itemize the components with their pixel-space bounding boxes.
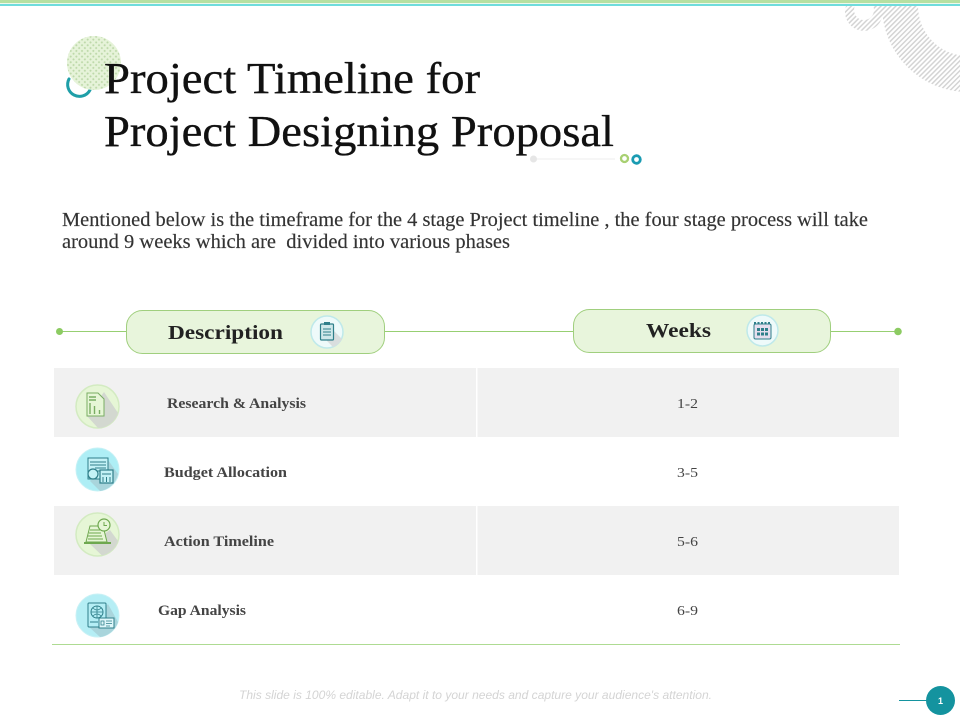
table row: Action Timeline: Action Timeline bbox=[164, 534, 274, 550]
table row: Research & Analysis bbox=[54, 368, 899, 437]
table row: Gap Analysis bbox=[76, 594, 698, 637]
page number badge bbox=[899, 686, 955, 715]
icon: budget calculator bbox=[76, 448, 119, 491]
icon: report document bbox=[76, 385, 119, 428]
table row: Budget Allocation: 3-5 bbox=[677, 466, 698, 481]
top colour band bbox=[0, 0, 960, 6]
header: Weeks: Weeks bbox=[646, 320, 711, 342]
header: Description: Description bbox=[168, 322, 283, 344]
intro text: Mentioned below is the timeframe for the 4 stage Project timeline , the four stage process will take bbox=[62, 210, 868, 231]
icon: action clock and papers bbox=[76, 513, 119, 556]
intro text bbox=[62, 210, 868, 253]
decorative hatched rings bbox=[845, 0, 960, 92]
title: Project Designing Proposal bbox=[104, 107, 614, 156]
page number badge: 1 bbox=[938, 696, 943, 706]
table row: Budget Allocation bbox=[76, 448, 698, 491]
title underline ornament bbox=[530, 155, 640, 163]
title bbox=[104, 54, 614, 156]
table row: Research & Analysis: Research & Analysis bbox=[167, 396, 306, 412]
header: Description bbox=[126, 310, 384, 354]
table row: Budget Allocation: Budget Allocation bbox=[164, 465, 288, 481]
icon: globe passport bbox=[76, 594, 119, 637]
table row: Research & Analysis: 1-2 bbox=[677, 397, 698, 412]
header: Weeks bbox=[574, 310, 830, 352]
table row: Gap Analysis: Gap Analysis bbox=[158, 603, 246, 619]
icon: calendar bbox=[747, 315, 778, 346]
title accent: dotted circle and teal arc bbox=[67, 36, 121, 96]
table row: Action Timeline bbox=[54, 506, 899, 575]
intro text: around 9 weeks which are divided into various phases bbox=[62, 232, 510, 253]
header connector line bbox=[56, 328, 902, 335]
icon: clipboard bbox=[311, 316, 343, 348]
table row: Action Timeline: 5-6 bbox=[677, 535, 698, 550]
table row: Gap Analysis: 6-9 bbox=[677, 604, 698, 619]
title: Project Timeline for bbox=[104, 54, 480, 103]
footer note: This slide is 100% editable. Adapt it to your needs and capture your audience's attention. bbox=[239, 688, 712, 702]
